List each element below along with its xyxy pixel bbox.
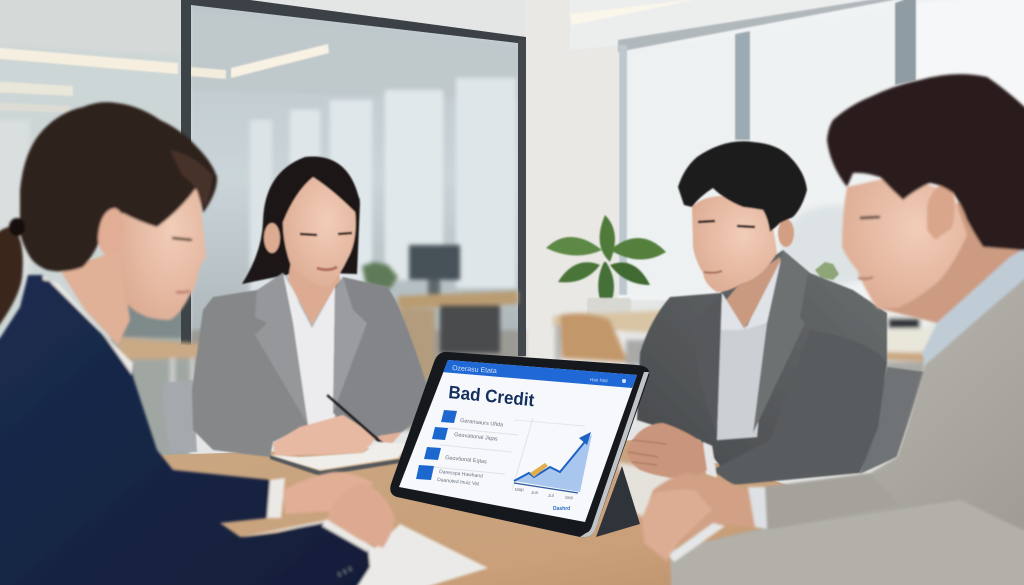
ear xyxy=(778,219,794,247)
background: ceiling lights xyxy=(0,0,695,113)
row 4: Daresspa Hawhand xyxy=(439,469,483,480)
person: left woman in navy xyxy=(0,102,488,585)
collar xyxy=(720,258,787,330)
eyes xyxy=(300,233,352,235)
hairline xyxy=(268,163,360,222)
face xyxy=(692,196,777,292)
hair tie xyxy=(9,218,25,236)
conference table xyxy=(160,440,1024,585)
background: glass meeting room xyxy=(0,0,525,460)
tablet body xyxy=(390,352,649,537)
row 2: Geovational Jiqas xyxy=(454,432,498,443)
neck xyxy=(722,257,783,330)
jacket xyxy=(637,250,887,483)
shirt collar xyxy=(922,238,1024,365)
neck xyxy=(288,255,340,325)
background: far table and chair xyxy=(553,305,945,376)
tablet screen xyxy=(399,360,637,522)
tablet xyxy=(390,352,649,537)
area chart: Map xyxy=(515,487,524,492)
hair xyxy=(827,74,1024,252)
hand front xyxy=(327,483,395,548)
eyes xyxy=(698,221,755,227)
clasped hands xyxy=(640,473,755,563)
row 4: Daanoted Inuiz Vat xyxy=(437,477,480,487)
neck xyxy=(877,200,1024,323)
row 3: Geovtional Eqtas xyxy=(445,455,487,465)
person: centre man xyxy=(627,141,887,485)
shirt collar xyxy=(43,275,133,375)
front paper xyxy=(240,520,488,585)
navy jacket xyxy=(0,275,370,585)
hair xyxy=(20,102,217,271)
lapels xyxy=(753,250,808,433)
cuff xyxy=(703,442,717,478)
glass room frame xyxy=(181,0,526,356)
upper sleeve xyxy=(763,473,900,530)
hand upper xyxy=(283,472,373,514)
area chart: Sep xyxy=(565,495,574,500)
row 4 xyxy=(416,465,483,487)
pen xyxy=(327,395,384,445)
shirt xyxy=(283,273,335,425)
jacket right xyxy=(333,277,428,442)
lower sleeve xyxy=(670,500,1024,585)
background: potted plant xyxy=(546,215,839,316)
person: woman with pen xyxy=(192,157,428,476)
eye xyxy=(172,238,192,240)
jacket xyxy=(670,260,1024,585)
person: right man xyxy=(640,74,1024,585)
sleeve cuff upper xyxy=(267,478,285,518)
heading: Bad Credit xyxy=(448,382,535,410)
ear xyxy=(927,184,955,240)
ear xyxy=(264,223,280,253)
tablet stand xyxy=(596,466,640,537)
hair xyxy=(678,141,807,232)
jacket left xyxy=(192,276,307,457)
face xyxy=(283,177,356,287)
area chart: Jun xyxy=(531,490,539,495)
area chart: Jul xyxy=(548,493,554,498)
area chart: Dashrd xyxy=(553,506,570,512)
sleeve xyxy=(712,330,887,485)
header bar xyxy=(441,358,639,388)
neck xyxy=(60,250,130,345)
hair back xyxy=(242,157,360,284)
clipboard xyxy=(270,442,408,470)
background: desk with monitor in glass room xyxy=(118,245,518,388)
lapels xyxy=(255,273,307,423)
buttons xyxy=(338,567,354,575)
face xyxy=(120,170,206,320)
list rows xyxy=(416,410,518,487)
hand xyxy=(627,423,707,478)
table reflection near tablet xyxy=(618,462,700,520)
ponytail xyxy=(0,226,23,350)
cuff xyxy=(748,487,767,529)
area chart xyxy=(512,418,592,512)
hand xyxy=(273,415,377,456)
background: large windows xyxy=(618,0,1024,300)
shirt xyxy=(717,323,767,440)
header text: Ozerasu Etata xyxy=(452,365,497,375)
ear xyxy=(98,208,125,257)
front cuff xyxy=(322,519,368,552)
face xyxy=(842,175,967,308)
header icons: Hao Noti xyxy=(590,377,608,383)
row 1: Geransaurs Ufida xyxy=(460,418,504,429)
chairs xyxy=(163,367,925,474)
eye xyxy=(860,217,880,218)
